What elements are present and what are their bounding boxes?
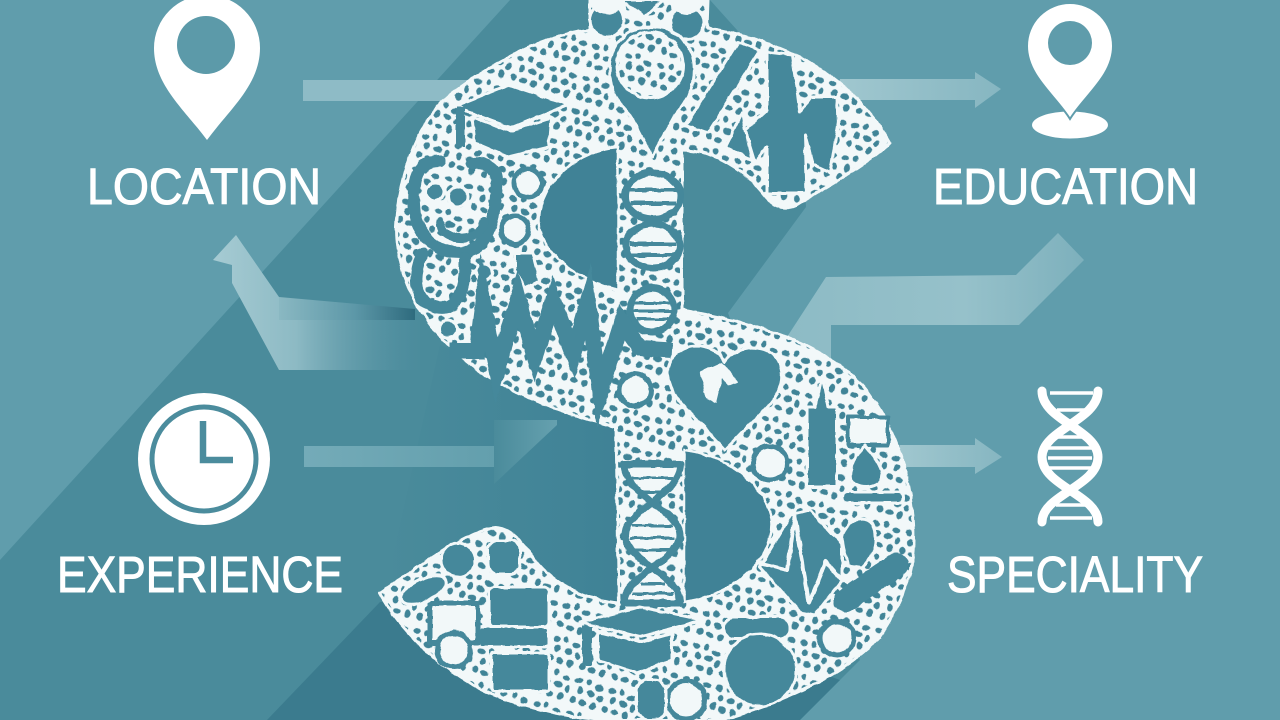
arrow: dollar to speciality <box>900 438 1002 474</box>
ecg line <box>449 299 672 392</box>
dna upper <box>625 173 681 332</box>
icon: clock <box>138 393 270 525</box>
heading: experience: EXPERIENCE <box>57 546 343 603</box>
dna lower <box>624 464 681 603</box>
head, capsule, circles right <box>636 519 896 720</box>
ecg panel lower <box>759 510 842 615</box>
stethoscope <box>414 161 497 308</box>
small round icons <box>426 169 542 338</box>
arrow: dollar to education <box>840 72 1001 108</box>
dollar sign made of medical icons <box>380 0 914 720</box>
arrow: curved up to location <box>213 235 420 370</box>
lower counter <box>684 450 772 602</box>
pill bar <box>686 42 760 133</box>
stacked books <box>430 587 549 691</box>
graduation cap lower <box>580 607 703 673</box>
graduation cap upper <box>456 85 568 157</box>
arrow: experience to dollar <box>304 420 557 484</box>
heading: speciality: SPECIALITY <box>947 546 1203 603</box>
icon: location pin <box>154 0 260 140</box>
top icons <box>590 0 704 40</box>
heading: location: LOCATION <box>87 158 321 215</box>
left arm icons <box>398 540 520 610</box>
icon: education pin <box>1027 3 1113 138</box>
syringe and notes <box>619 374 903 503</box>
dollar silhouette <box>380 0 914 720</box>
mountain shape <box>725 52 838 193</box>
arrow: curved up to education <box>787 233 1084 360</box>
arrow: location to dollar <box>303 80 478 101</box>
map pin <box>610 27 694 157</box>
icon: dna helix <box>1042 391 1098 522</box>
upper counter <box>539 147 618 290</box>
heading: education: EDUCATION <box>933 158 1198 215</box>
heart <box>668 346 782 450</box>
